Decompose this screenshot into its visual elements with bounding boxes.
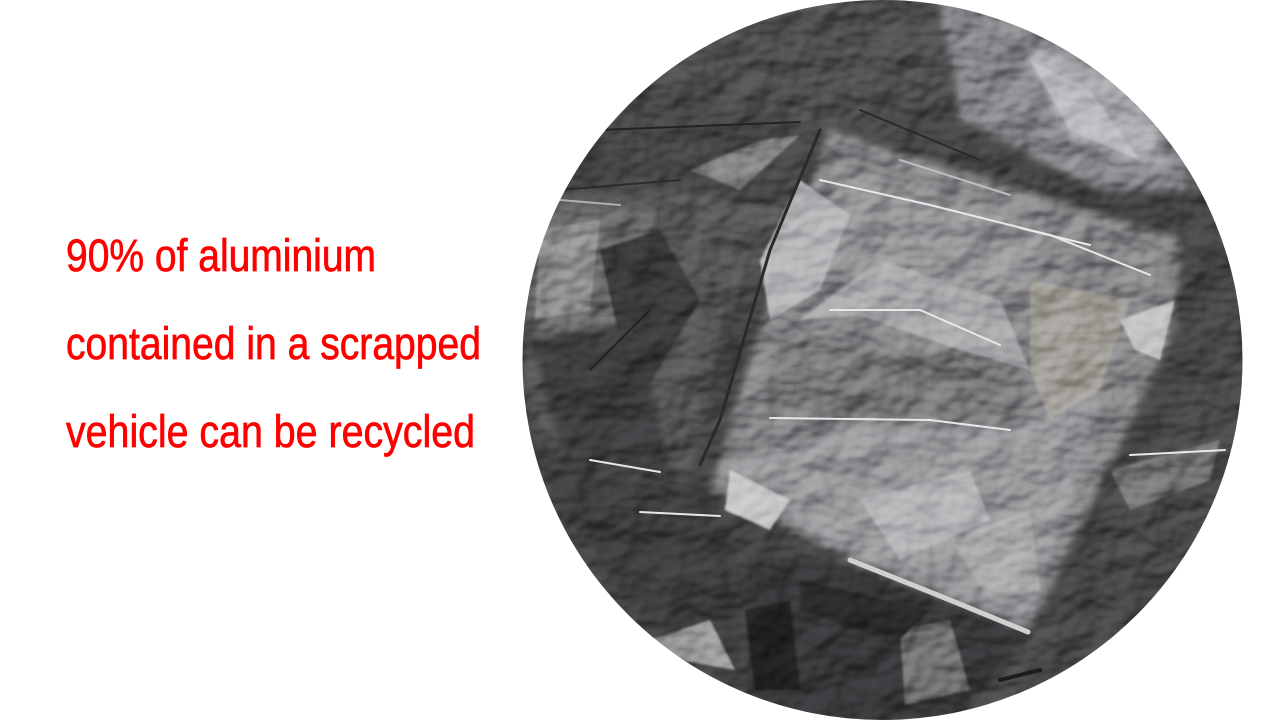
circular photo: crushed aluminium scrap	[520, 0, 1245, 720]
headline text: contained in a scrapped	[66, 318, 481, 369]
headline text: vehicle can be recycled	[66, 406, 475, 457]
bright crease lines	[560, 110, 1225, 680]
headline text	[66, 230, 481, 457]
headline text: 90% of aluminium	[66, 230, 376, 281]
crumple highlights	[535, 60, 1220, 705]
tonal base regions	[523, 0, 1245, 720]
foil crumple texture	[520, 0, 1245, 720]
